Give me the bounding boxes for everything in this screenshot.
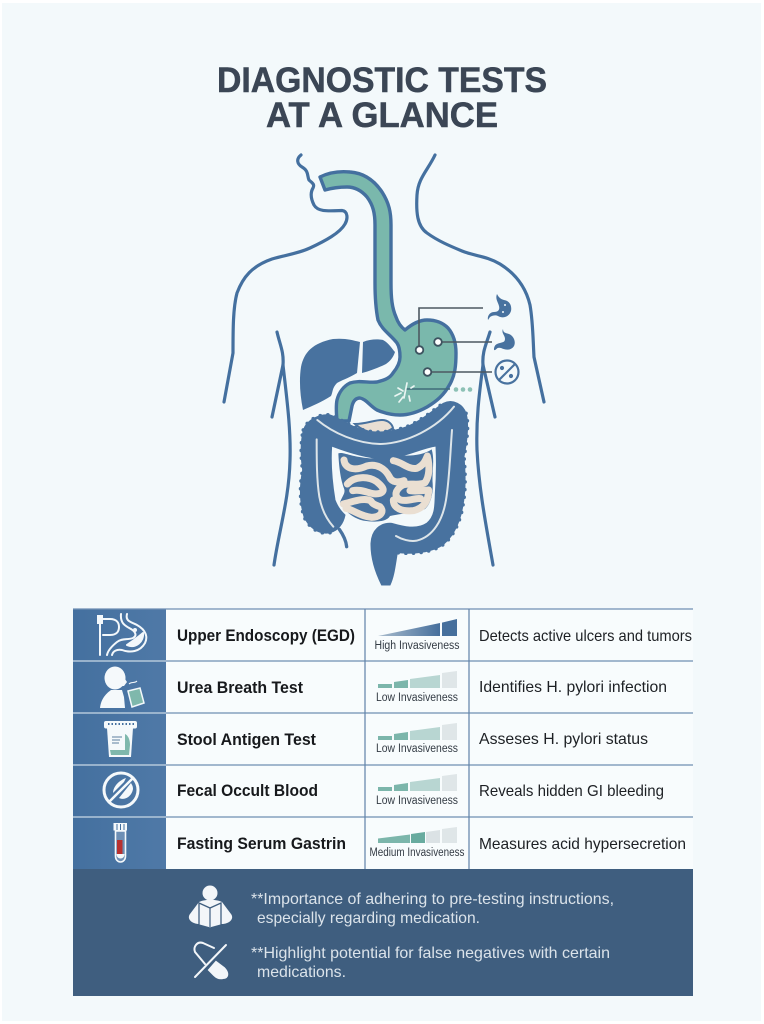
note text one: **Importance of adhering to pre-testing instructions, [251,891,614,908]
icon: person reading [189,886,232,928]
icon: stomach one [488,294,511,320]
bar: medium invasiveness [378,827,457,843]
icon column [73,609,166,869]
row 2: urea breath [100,666,667,708]
notes background [73,869,693,996]
title: AT A GLANCE [266,96,498,135]
result: assesses: Asseses H. pylori status [479,731,648,748]
note text two: medications. [257,964,346,981]
bar: low invasiveness [378,774,457,791]
caption: low invasiveness: Low Invasiveness [376,743,458,755]
title: DIAGNOSTIC TESTS [217,61,547,100]
anatomy illustration [224,155,544,585]
row 1: upper endoscopy [97,614,692,655]
duodenum loop [355,420,393,433]
note text one: especially regarding medication. [257,910,480,927]
callout markers [416,338,442,376]
liver [300,339,395,410]
row 5: fasting serum gastrin [114,823,686,862]
note text one [251,891,614,927]
table cells background [166,609,693,869]
title [217,61,547,135]
colon [301,402,468,585]
icon: prohibition [496,360,518,384]
label: fasting serum: Fasting Serum Gastrin [177,834,346,853]
caption: low invasiveness: Low Invasiveness [376,692,458,704]
icon: endoscope [97,614,146,655]
esophagus and stomach [320,172,456,421]
row 3: stool antigen [104,721,648,757]
label: fecal occult: Fecal Occult Blood [177,781,318,800]
icon: blood tube [114,823,127,862]
label: stool antigen: Stool Antigen Test [177,730,316,749]
result: measures: Measures acid hypersecretion [479,836,686,853]
caption: high invasiveness: High Invasiveness [374,640,460,652]
label: upper endoscopy: Upper Endoscopy (EGD) [177,626,355,645]
note text two: **Highlight potential for false negatives with certain [251,945,610,962]
small intestine [338,449,433,522]
table [73,609,693,869]
row 4: fecal occult blood [104,773,664,807]
caption: low invasiveness: Low Invasiveness [376,795,458,807]
result: detects: Detects active ulcers and tumors [479,628,692,645]
teal dots [454,387,472,392]
icon: person breathing [100,666,144,708]
notes panel [73,869,693,996]
table grid [73,609,693,869]
bar: low invasiveness [378,671,457,688]
bar: low invasiveness [378,723,457,740]
ulcer marker [395,383,414,402]
label: urea breath: Urea Breath Test [177,678,303,697]
result: reveals: Reveals hidden GI bleeding [479,783,664,800]
result: identifies: Identifies H. pylori infection [479,679,667,696]
caption: medium invasiveness: Medium Invasiveness [370,847,465,859]
bar: high invasiveness [378,619,457,636]
icon: no blood drop [104,773,138,807]
icon: specimen cup [104,721,137,757]
note text two [251,945,610,981]
icon: no pill [194,943,227,978]
body outline [224,155,544,565]
icon: stomach two [494,329,515,350]
callout lines [405,308,492,389]
